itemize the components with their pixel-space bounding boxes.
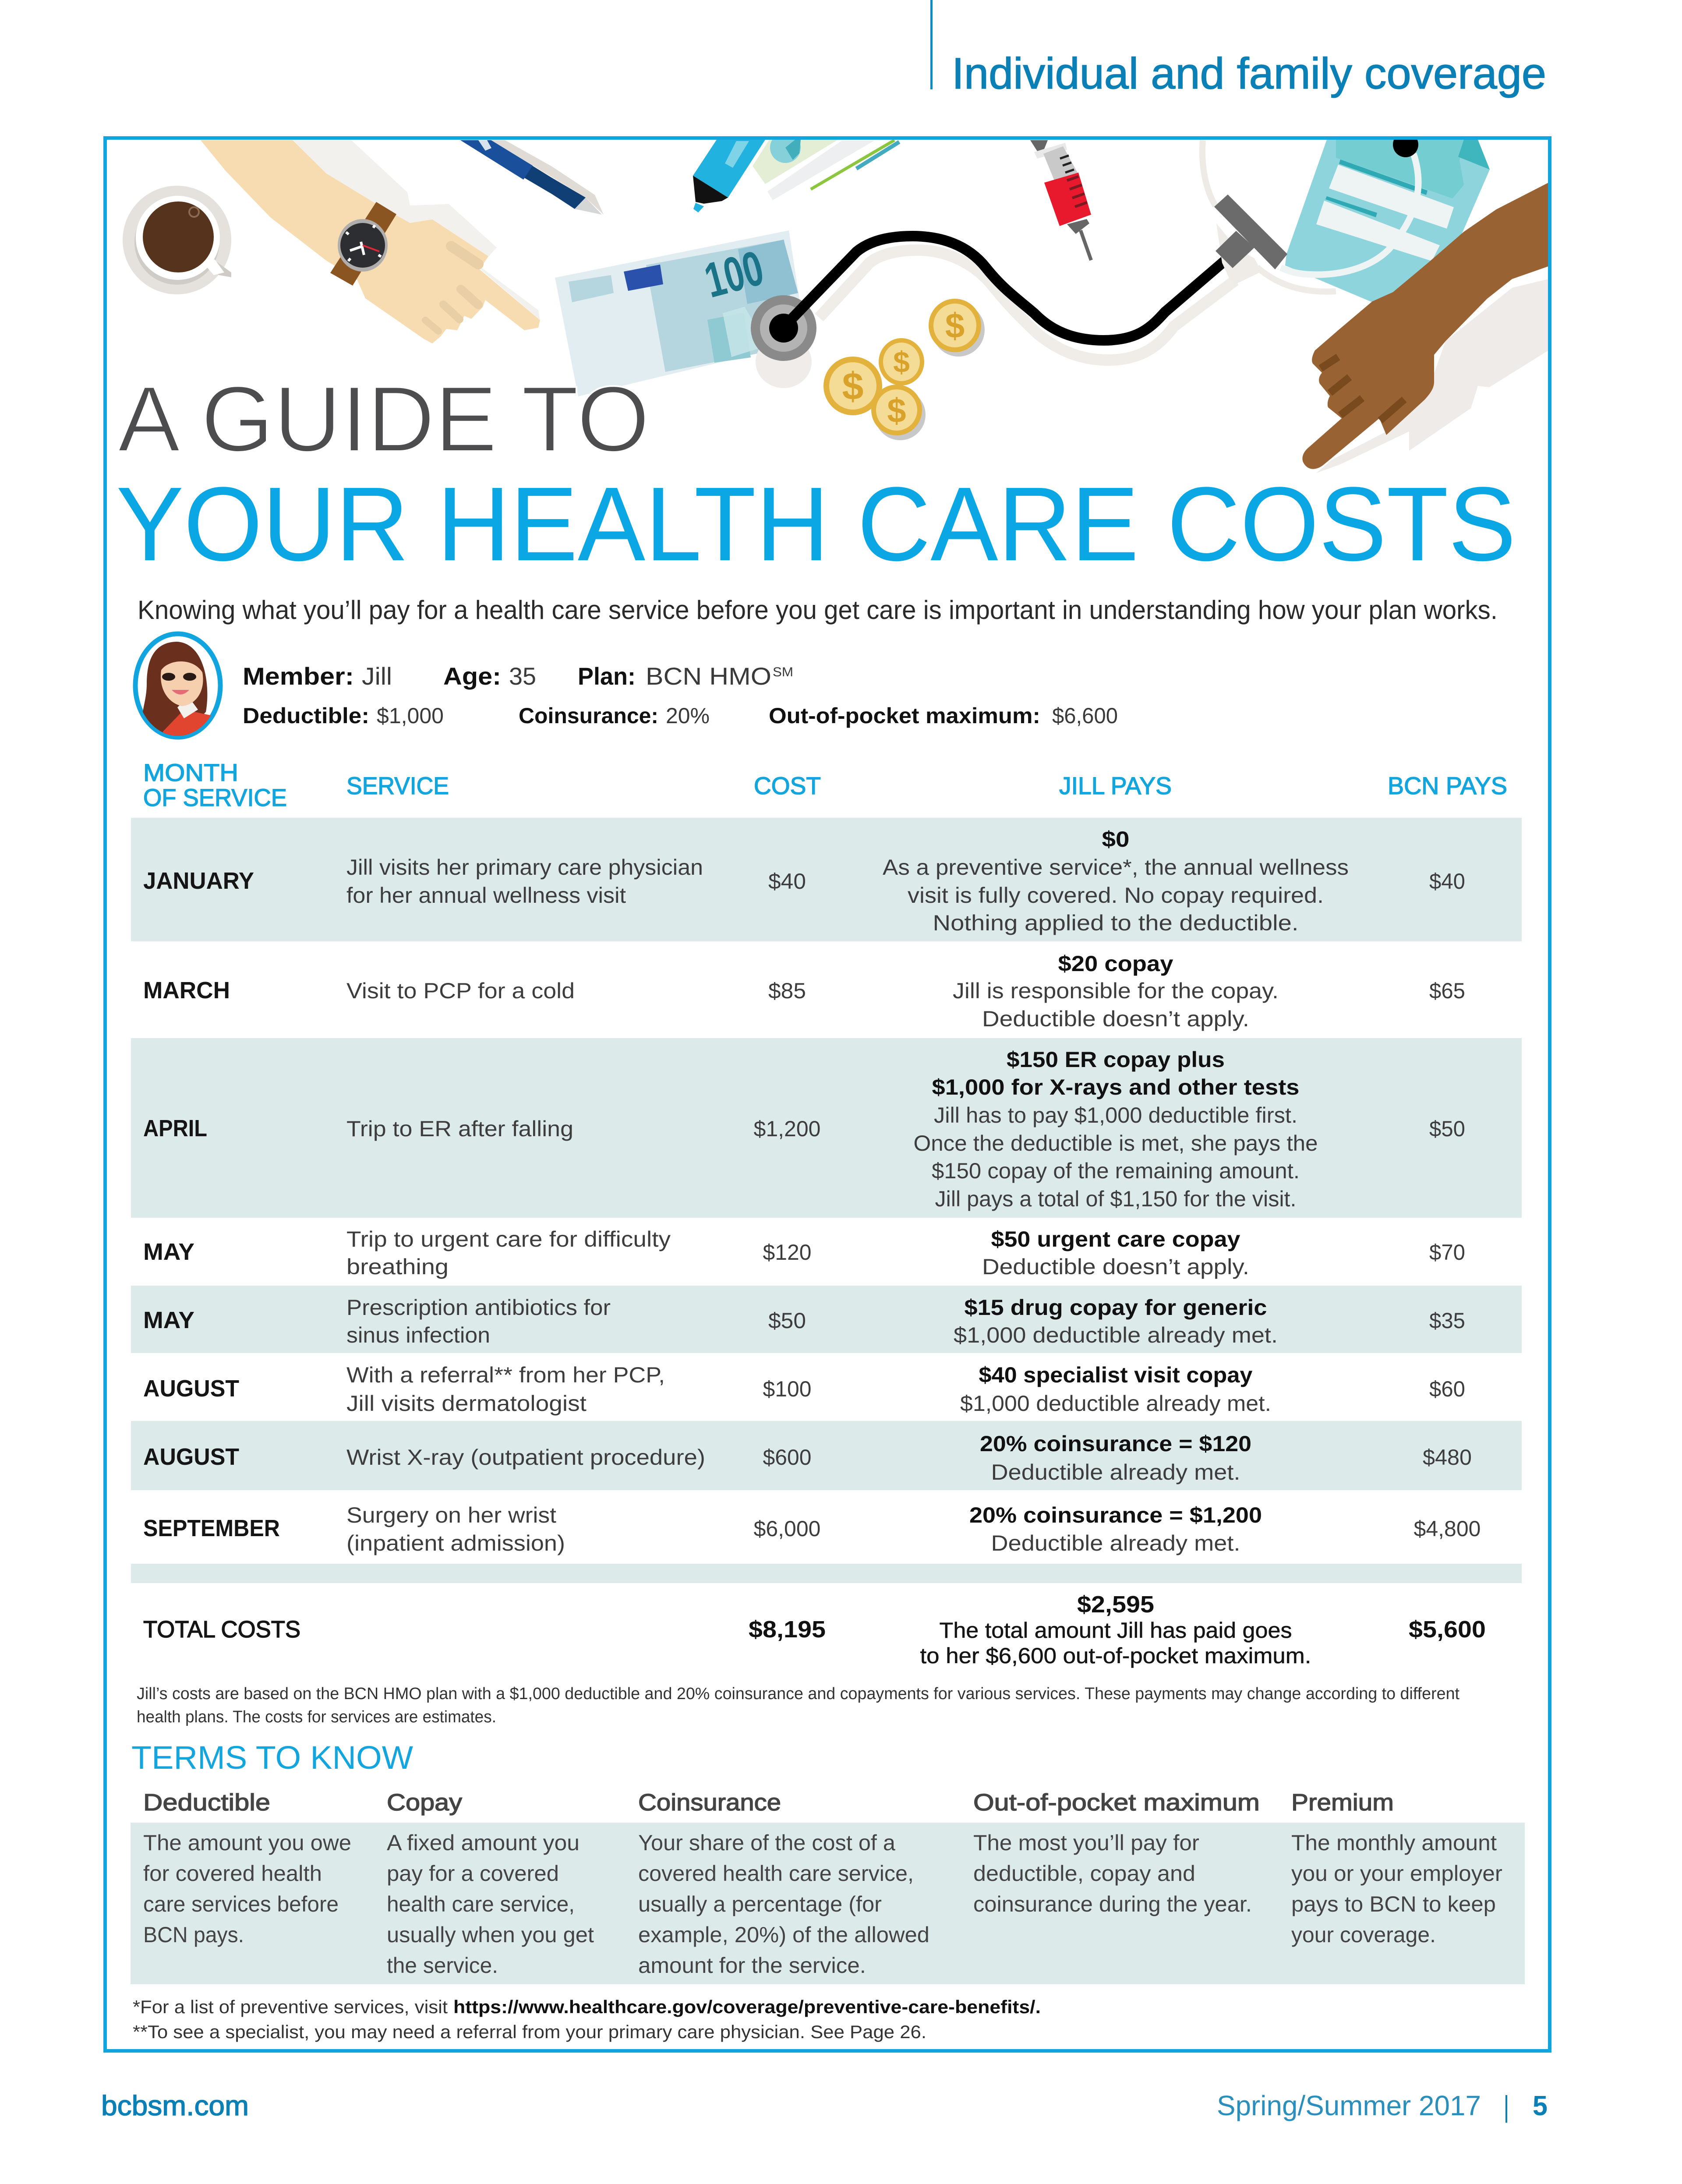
row: January: $40 <box>768 869 806 894</box>
row: May prescription: $50 <box>768 1308 806 1333</box>
row: January: $40 <box>1429 869 1465 894</box>
heading: terms to know: TERMS TO KNOW <box>131 1739 413 1776</box>
icon: blue pen <box>460 140 604 215</box>
row: May prescription: Prescription antibiotics for <box>346 1295 611 1320</box>
section header: Individual and family coverage <box>952 49 1546 98</box>
term: deductible: BCN pays. <box>143 1922 244 1947</box>
footnotes: **To see a specialist, you may need a referral from your primary care physician. See Page 26. <box>133 2021 926 2042</box>
row: March: MARCH <box>143 977 230 1004</box>
term: out-of-pocket maximum: coinsurance during the year. <box>973 1892 1252 1916</box>
title <box>116 367 1516 583</box>
term: out-of-pocket maximum: deductible, copay and <box>973 1861 1195 1886</box>
row: May urgent care: $120 <box>763 1240 811 1265</box>
row: September: (inpatient admission) <box>346 1531 565 1555</box>
row: March: Deductible doesn’t apply. <box>982 1007 1249 1031</box>
row: September: $4,800 <box>1414 1516 1481 1541</box>
title: A GUIDE TO <box>118 367 650 471</box>
row: May prescription: MAY <box>143 1307 194 1333</box>
member details: Jill <box>362 662 392 690</box>
term: out-of-pocket maximum: Out-of-pocket maximum <box>973 1789 1260 1816</box>
icon: gold coins: $ <box>945 306 965 345</box>
row: January: Nothing applied to the deductible. <box>933 911 1298 935</box>
icon: gold coins: $ <box>842 364 863 408</box>
member details: Deductible: <box>243 703 369 728</box>
separator band <box>131 1564 1522 1583</box>
term: coinsurance: usually a percentage (for <box>638 1892 882 1916</box>
table header: JILL PAYS <box>1059 772 1172 799</box>
term: copay <box>387 1789 594 1978</box>
row: total costs: $5,600 <box>1409 1616 1486 1643</box>
footnotes: *For a list of preventive services, visit <box>133 1997 448 2017</box>
term: copay: A fixed amount you <box>387 1831 580 1855</box>
row: April: $1,200 <box>753 1117 821 1141</box>
icon: gold coins: $ <box>887 391 906 430</box>
row: August specialist: Jill visits dermatologist <box>346 1391 587 1416</box>
term: out-of-pocket maximum: The most you’ll pay for <box>973 1831 1199 1855</box>
row: May urgent care: Deductible doesn’t apply. <box>982 1255 1249 1279</box>
row: August X-ray: Wrist X-ray (outpatient procedure) <box>346 1445 705 1470</box>
term: copay: usually when you get <box>387 1922 594 1947</box>
row: August specialist: $100 <box>763 1377 811 1401</box>
table footnote: Jill’s costs are based on the BCN HMO plan with a $1,000 deductible and 20% coinsurance and copayments for various services. These payments may change according to different <box>137 1685 1459 1703</box>
row: August specialist: $60 <box>1429 1377 1465 1401</box>
term: premium <box>1291 1789 1502 1947</box>
row: August specialist: $1,000 deductible already met. <box>960 1391 1271 1416</box>
terms panel <box>131 1789 1525 1984</box>
row: April <box>131 1038 1522 1218</box>
row: total costs <box>143 1591 1486 1668</box>
term: out-of-pocket maximum <box>973 1789 1260 1916</box>
icon: pale hand with wristwatch <box>201 140 540 343</box>
row: August X-ray: Deductible already met. <box>991 1460 1240 1484</box>
term: coinsurance: Coinsurance <box>638 1789 781 1816</box>
table header: MONTH <box>143 759 238 786</box>
term: premium: pays to BCN to keep <box>1291 1892 1496 1916</box>
page footer <box>101 2090 1548 2123</box>
row: May prescription <box>131 1286 1522 1353</box>
icon: dark hand pointing <box>1302 183 1548 473</box>
member details: 20% <box>666 703 710 728</box>
term: coinsurance: amount for the service. <box>638 1953 866 1978</box>
row: September: $6,000 <box>753 1516 821 1541</box>
row: August specialist: AUGUST <box>143 1375 239 1402</box>
term: premium: Premium <box>1291 1789 1394 1816</box>
row: April: $150 copay of the remaining amount. <box>932 1159 1300 1183</box>
member details: SM <box>773 665 793 679</box>
row: March: $65 <box>1429 979 1465 1003</box>
row: total costs: The total amount Jill has paid goes <box>939 1618 1292 1643</box>
term: deductible: Deductible <box>143 1789 270 1816</box>
icon: medical bag <box>1202 132 1490 302</box>
term: premium: your coverage. <box>1291 1922 1436 1947</box>
cost table <box>131 759 1522 1668</box>
title: YOUR HEALTH CARE COSTS <box>116 465 1516 583</box>
row: January: JANUARY <box>143 868 254 894</box>
row: August X-ray: $480 <box>1423 1445 1472 1470</box>
icon: Jill avatar <box>135 634 220 740</box>
row: May prescription: $15 drug copay for generic <box>965 1295 1267 1320</box>
member details: Age: <box>443 662 501 690</box>
member details <box>243 662 1118 728</box>
row: total costs: to her $6,600 out-of-pocket maximum. <box>920 1643 1311 1668</box>
member details: Out-of-pocket maximum: <box>769 703 1040 728</box>
member details: Member: <box>243 662 354 690</box>
footnotes: https://www.healthcare.gov/coverage/preventive-care-benefits/. <box>453 1997 1041 2017</box>
member details: $1,000 <box>377 703 444 728</box>
row: March: $20 copay <box>1058 951 1173 976</box>
row: April: Once the deductible is met, she pays the <box>914 1131 1318 1156</box>
table footnote <box>137 1685 1459 1726</box>
row: May urgent care: Trip to urgent care for difficulty <box>346 1227 671 1251</box>
row: September <box>143 1503 1481 1555</box>
term: copay: the service. <box>387 1953 498 1978</box>
row: April: Jill has to pay $1,000 deductible first. <box>934 1103 1297 1127</box>
row: January: visit is fully covered. No copay required. <box>908 883 1324 908</box>
row: April: Trip to ER after falling <box>346 1117 573 1141</box>
hero illustration <box>123 132 1548 473</box>
term: deductible: care services before <box>143 1892 339 1916</box>
page footer: bcbsm.com <box>101 2090 249 2121</box>
row: May urgent care: MAY <box>143 1239 194 1265</box>
icon: tube connector <box>1214 194 1287 286</box>
term: deductible: for covered health <box>143 1861 322 1886</box>
row: August X-ray: 20% coinsurance = $120 <box>980 1431 1251 1456</box>
member details: $6,600 <box>1052 703 1118 728</box>
row: March: Visit to PCP for a cold <box>346 979 575 1003</box>
intro text: Knowing what you’ll pay for a health care service before you get care is important in understanding how your plan works. <box>138 595 1498 625</box>
icon: 100 banknote: 100 <box>699 240 769 308</box>
row: May urgent care: $70 <box>1429 1240 1465 1265</box>
row: March: $85 <box>768 979 806 1003</box>
term: copay: pay for a covered <box>387 1861 559 1886</box>
icon: 100 banknote <box>555 230 806 396</box>
row: March <box>143 951 1465 1031</box>
row: April: $1,000 for X-rays and other tests <box>932 1075 1299 1099</box>
term: coinsurance: Your share of the cost of a <box>638 1831 895 1855</box>
row: May prescription: sinus infection <box>346 1323 490 1347</box>
member profile <box>135 634 1118 740</box>
row: August specialist <box>143 1363 1465 1416</box>
row: April: APRIL <box>143 1115 207 1141</box>
outer frame <box>105 138 1550 2051</box>
icon: highlighter marker <box>693 140 765 212</box>
term: copay: health care service, <box>387 1892 575 1916</box>
footnotes <box>133 1997 1041 2042</box>
term: coinsurance: example, 20%) of the allowed <box>638 1922 929 1947</box>
icon: gold coins: $ <box>893 346 910 379</box>
row: April: $50 <box>1429 1117 1465 1141</box>
row: January: for her annual wellness visit <box>346 883 626 908</box>
table header <box>143 759 1507 811</box>
icon: paper with chart <box>753 140 901 200</box>
row: January: Jill visits her primary care physician <box>346 855 703 880</box>
term: copay: Copay <box>387 1789 462 1816</box>
term: coinsurance <box>638 1789 929 1978</box>
row: April: $150 ER copay plus <box>1007 1047 1225 1072</box>
row: total costs: $8,195 <box>749 1616 826 1643</box>
term: premium: The monthly amount <box>1291 1831 1497 1855</box>
row: August X-ray: AUGUST <box>143 1444 239 1470</box>
row: May prescription: $1,000 deductible already met. <box>954 1323 1278 1347</box>
table header: SERVICE <box>346 772 449 799</box>
row: May urgent care: $50 urgent care copay <box>991 1227 1240 1251</box>
row: May prescription: $35 <box>1429 1308 1465 1333</box>
table header: OF SERVICE <box>143 784 287 811</box>
icon: coffee cup <box>123 186 231 294</box>
member details: Plan: <box>578 662 636 690</box>
table footnote: health plans. The costs for services are estimates. <box>137 1708 496 1726</box>
member details: BCN HMO <box>646 662 771 690</box>
icon: stethoscope <box>751 236 1235 388</box>
section header <box>930 0 1546 98</box>
row: March: Jill is responsible for the copay. <box>953 979 1279 1003</box>
row: September: SEPTEMBER <box>143 1515 280 1541</box>
member details: Coinsurance: <box>519 703 658 728</box>
icon: gold coins <box>823 299 985 440</box>
row: total costs: TOTAL COSTS <box>143 1616 300 1643</box>
page footer: 5 <box>1533 2090 1548 2121</box>
row: January <box>131 818 1522 941</box>
row: May urgent care <box>143 1227 1465 1279</box>
term: deductible: The amount you owe <box>143 1831 351 1855</box>
page footer: Spring/Summer 2017 <box>1217 2090 1481 2121</box>
row: August specialist: $40 specialist visit copay <box>979 1363 1253 1387</box>
row: August X-ray <box>131 1421 1522 1490</box>
row: September: Deductible already met. <box>991 1531 1240 1555</box>
term: deductible <box>143 1789 351 1947</box>
row: April: Jill pays a total of $1,150 for the visit. <box>935 1187 1297 1211</box>
row: September: 20% coinsurance = $1,200 <box>969 1503 1262 1527</box>
member details: 35 <box>509 662 536 690</box>
row: September: Surgery on her wrist <box>346 1503 556 1527</box>
icon: syringe <box>1030 140 1091 260</box>
row: August specialist: With a referral** from her PCP, <box>346 1363 665 1387</box>
row: total costs: $2,595 <box>1077 1591 1154 1618</box>
row: August X-ray: $600 <box>763 1445 811 1470</box>
row: January: $0 <box>1102 827 1129 852</box>
row: May urgent care: breathing <box>346 1255 449 1279</box>
table header: COST <box>754 772 821 799</box>
table header: BCN PAYS <box>1388 772 1507 799</box>
row: January: As a preventive service*, the annual wellness <box>883 855 1349 880</box>
term: coinsurance: covered health care service, <box>638 1861 914 1886</box>
term: premium: you or your employer <box>1291 1861 1502 1886</box>
